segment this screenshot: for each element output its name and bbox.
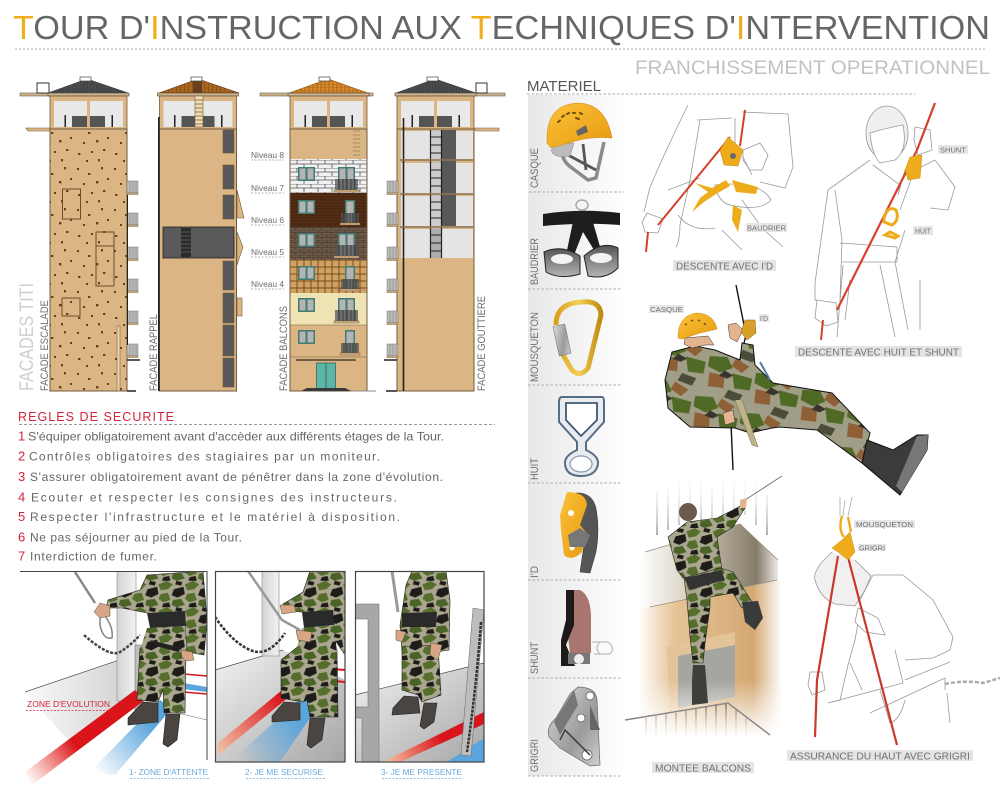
tower: facade rappel [158, 77, 244, 391]
rule 5: 5 [18, 509, 25, 524]
rule 4: Ecouter et respecter les consignes des instructeurs. [31, 490, 397, 504]
rule 3: 3 [18, 469, 25, 484]
panel: regles de securite [18, 410, 495, 564]
label: grigri: GRIGRI [859, 544, 885, 552]
item: i'd: I'D [529, 566, 541, 578]
rule 4: 4 [18, 490, 25, 504]
level labels: Niveau 6 [251, 215, 284, 225]
item: baudrier [529, 200, 620, 285]
label: facade balcons: FACADE BALCONS [278, 306, 290, 391]
rule 7: 7 [18, 548, 25, 564]
step labels: 3- JE ME PRESENTE [381, 767, 462, 777]
tower: facade balcons [260, 77, 376, 391]
level labels: Niveau 4 [251, 279, 284, 289]
step labels: 1- ZONE D'ATTENTE [129, 767, 208, 777]
vertical heading: facades titi: FACADES TITI [16, 283, 38, 391]
label: i'd: I'D [760, 314, 769, 323]
illustration: je me presente [355, 571, 484, 762]
rule 2: Contrôles obligatoires des stagiaires par un moniteur. [29, 450, 380, 464]
item: huit [529, 397, 604, 480]
label: casque: CASQUE [650, 305, 683, 314]
tower: facade escalade [20, 77, 140, 391]
item: huit: HUIT [529, 458, 541, 480]
label: zone d'evolution: ZONE D'EVOLUTION [27, 699, 110, 709]
item: mousqueton: MOUSQUETON [529, 312, 541, 382]
level labels: Niveau 7 [251, 183, 284, 193]
illustration: montee balcons [625, 470, 785, 745]
caption: descente avec i'd: DESCENTE AVEC I'D [676, 260, 773, 272]
rule 1: 1 [18, 428, 25, 444]
caption: montee balcons: MONTEE BALCONS [655, 762, 751, 774]
subtitle: FRANCHISSEMENT OPERATIONNEL [635, 57, 990, 79]
rule 2: 2 [18, 448, 25, 464]
item: casque: CASQUE [529, 148, 541, 188]
rule 7: Interdiction de fumer. [30, 550, 157, 564]
caption: assurance du haut avec grigri: ASSURANCE DU HAUT AVEC GRIGRI [790, 750, 970, 762]
tower: facade gouttiere [384, 77, 505, 391]
title: TOUR D'INSTRUCTION AUX TECHNIQUES D' INTERVENTION [13, 9, 990, 46]
rule 1: S'équiper obligatoirement avant d'accèder aux différents étages de la Tour. [28, 430, 444, 444]
label: mousqueton: MOUSQUETON [856, 520, 913, 529]
illustration: je me securise [215, 571, 345, 762]
panel: facades [16, 77, 505, 391]
item: mousqueton [529, 302, 601, 382]
item: shunt [529, 590, 613, 674]
illustration: zone d'attente [20, 571, 207, 796]
label: baudrier: BAUDRIER [747, 224, 787, 232]
rule 6: Ne pas séjourner au pied de la Tour. [30, 530, 242, 544]
illustration: descente avec i'd [642, 105, 793, 252]
label: shunt: SHUNT [940, 146, 966, 154]
item: grigri [529, 687, 600, 772]
device and harness [720, 137, 743, 166]
label: facade gouttiere: FACADE GOUTTIERE [476, 296, 488, 391]
level labels: Niveau 5 [251, 247, 284, 257]
illustration: assurance du haut avec grigri [808, 497, 1000, 745]
rule 5: Respecter l'infrastructure et le matériel à disposition. [30, 510, 400, 524]
level labels: Niveau 8 [251, 150, 284, 160]
label: facade escalade: FACADE ESCALADE [39, 300, 51, 391]
heading: materiel: MATERIEL [527, 78, 601, 95]
caption: descente avec huit et shunt: DESCENTE AVEC HUIT ET SHUNT [798, 346, 960, 358]
heading: regles: REGLES DE SECURITE [18, 410, 174, 424]
rope [646, 110, 745, 252]
item: shunt: SHUNT [529, 642, 541, 674]
item: i'd [529, 492, 598, 578]
label: huit: HUIT [915, 226, 931, 236]
panel: materiel sidebar [528, 95, 624, 776]
item: casque [529, 103, 612, 188]
label: facade rappel: FACADE RAPPEL [148, 314, 160, 391]
step labels: 2- JE ME SECURISE [245, 767, 323, 777]
step labels [129, 767, 463, 778]
rule 6: 6 [18, 530, 25, 544]
illustration: descente avec huit et shunt [815, 103, 955, 340]
rule 3: S'assurer obligatoirement avant de pénêtrer dans la zone d'évolution. [30, 470, 443, 484]
item: baudrier: BAUDRIER [529, 238, 541, 285]
item: grigri: GRIGRI [529, 739, 541, 772]
level labels [251, 150, 284, 289]
illustration: rappel soldier [665, 285, 928, 495]
